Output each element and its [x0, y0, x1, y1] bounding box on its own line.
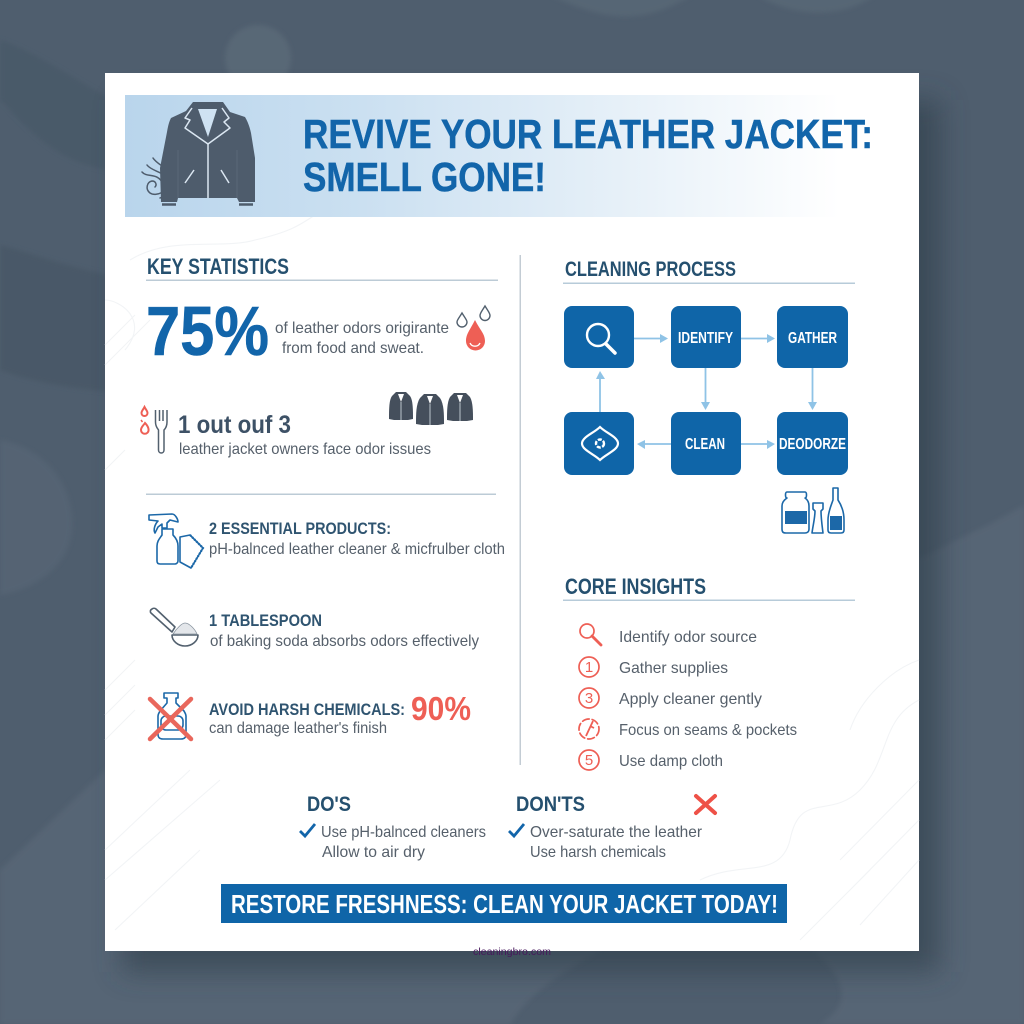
insight: focus on seams and pockets: [579, 719, 797, 739]
title: REVIVE YOUR LEATHER JACKET:: [303, 111, 873, 157]
panel: don'ts: Over-saturate the leather: [530, 824, 703, 841]
item: essential products: 2 ESSENTIAL PRODUCTS:: [209, 519, 391, 538]
item: tablespoon: 1 TABLESPOON: [209, 611, 322, 630]
icon: three jackets: [389, 392, 473, 425]
icon: supply bottles: [782, 488, 844, 533]
item: essential products: pH-balnced leather cleaner & micfrulber cloth: [209, 541, 505, 558]
step: identify: [671, 306, 741, 368]
insight: apply cleaner gently: 3: [585, 690, 593, 707]
item: essential products: [149, 514, 505, 568]
panel: don'ts: [509, 793, 715, 861]
header banner: [125, 95, 919, 217]
flow chart: [564, 306, 848, 475]
step: gather: GATHER: [788, 330, 837, 347]
call to action banner: RESTORE FRESHNESS: CLEAN YOUR JACKET TODAY!: [231, 889, 778, 919]
insight: gather supplies: [579, 657, 728, 677]
icon: fork with flames: [141, 407, 167, 453]
icon: spoon of baking soda: [150, 608, 198, 646]
icon: check mark: [300, 824, 315, 836]
insight: use damp cloth: 5: [585, 752, 593, 769]
panel: cleaning process: [563, 258, 855, 533]
icon: crossed-out chemical bottle: [150, 693, 191, 739]
title: [303, 111, 873, 200]
arrows between steps: [596, 334, 817, 449]
insight: focus on seams and pockets: Focus on seams & pockets: [619, 722, 797, 739]
panel: core insights: [563, 574, 855, 770]
item: avoid harsh chemicals: can damage leather's finish: [209, 720, 387, 737]
title: SMELL GONE!: [303, 154, 546, 200]
insight: use damp cloth: Use damp cloth: [619, 753, 723, 770]
heading: cleaning process: CLEANING PROCESS: [565, 258, 736, 281]
heading: key statistics: KEY STATISTICS: [147, 254, 289, 279]
step: cloth icon box: [564, 412, 634, 475]
insight: gather supplies: 1: [585, 659, 593, 676]
insight: gather supplies: Gather supplies: [619, 660, 728, 677]
item: tablespoon: of baking soda absorbs odors effectively: [210, 633, 479, 650]
panel: do's: [300, 793, 486, 861]
stat: 1 out of 3: [178, 411, 431, 458]
call to action banner: [221, 884, 787, 923]
step: deodorize: DEODORZE: [779, 436, 846, 453]
stat: 1 out of 3: leather jacket owners face odor issues: [179, 441, 431, 458]
panel: do's: DO'S: [307, 793, 351, 816]
panel: don'ts: DON'TS: [516, 793, 585, 816]
card: [105, 73, 919, 951]
stat: 75 percent: [146, 292, 449, 370]
step: deodorize: [777, 412, 848, 475]
panel: do's: Use pH-balnced cleaners: [321, 824, 486, 841]
item: tablespoon: [150, 608, 479, 650]
stat: 75 percent: 75%: [146, 292, 269, 370]
panel: don'ts: Use harsh chemicals: [530, 844, 666, 861]
icon: spray bottle and cloth: [149, 514, 203, 568]
step: search icon box: [564, 306, 634, 368]
icon: leather jacket with odor swirl: [142, 102, 255, 204]
panel: key statistics: [141, 254, 505, 739]
icon: red cross: [696, 796, 715, 813]
heading: core insights: CORE INSIGHTS: [565, 574, 706, 599]
icon: odor drops: [457, 306, 490, 350]
step: clean: [671, 412, 741, 475]
insight: use damp cloth: [579, 750, 723, 770]
insight: apply cleaner gently: [579, 688, 762, 708]
item: avoid harsh chemicals: 90%: [411, 690, 471, 727]
stat: 75 percent: from food and sweat.: [282, 340, 424, 357]
watermark: cleaningbro.com: [473, 947, 551, 958]
stat: 1 out of 3: 1 out ouf 3: [178, 411, 291, 439]
item: avoid harsh chemicals: AVOID HARSH CHEMICALS:: [209, 700, 405, 719]
stat: 75 percent: of leather odors origirante: [275, 320, 449, 337]
step: clean: CLEAN: [685, 436, 725, 453]
panel: do's: Allow to air dry: [322, 844, 425, 861]
step: gather: [777, 306, 848, 368]
insight: identify odor source: [580, 624, 757, 646]
item: avoid harsh chemicals: [150, 690, 471, 739]
step: identify: IDENTIFY: [678, 330, 733, 347]
icon: check mark: [509, 824, 524, 836]
insight: identify odor source: Identify odor source: [619, 629, 757, 646]
insight: apply cleaner gently: Apply cleaner gently: [619, 691, 762, 708]
